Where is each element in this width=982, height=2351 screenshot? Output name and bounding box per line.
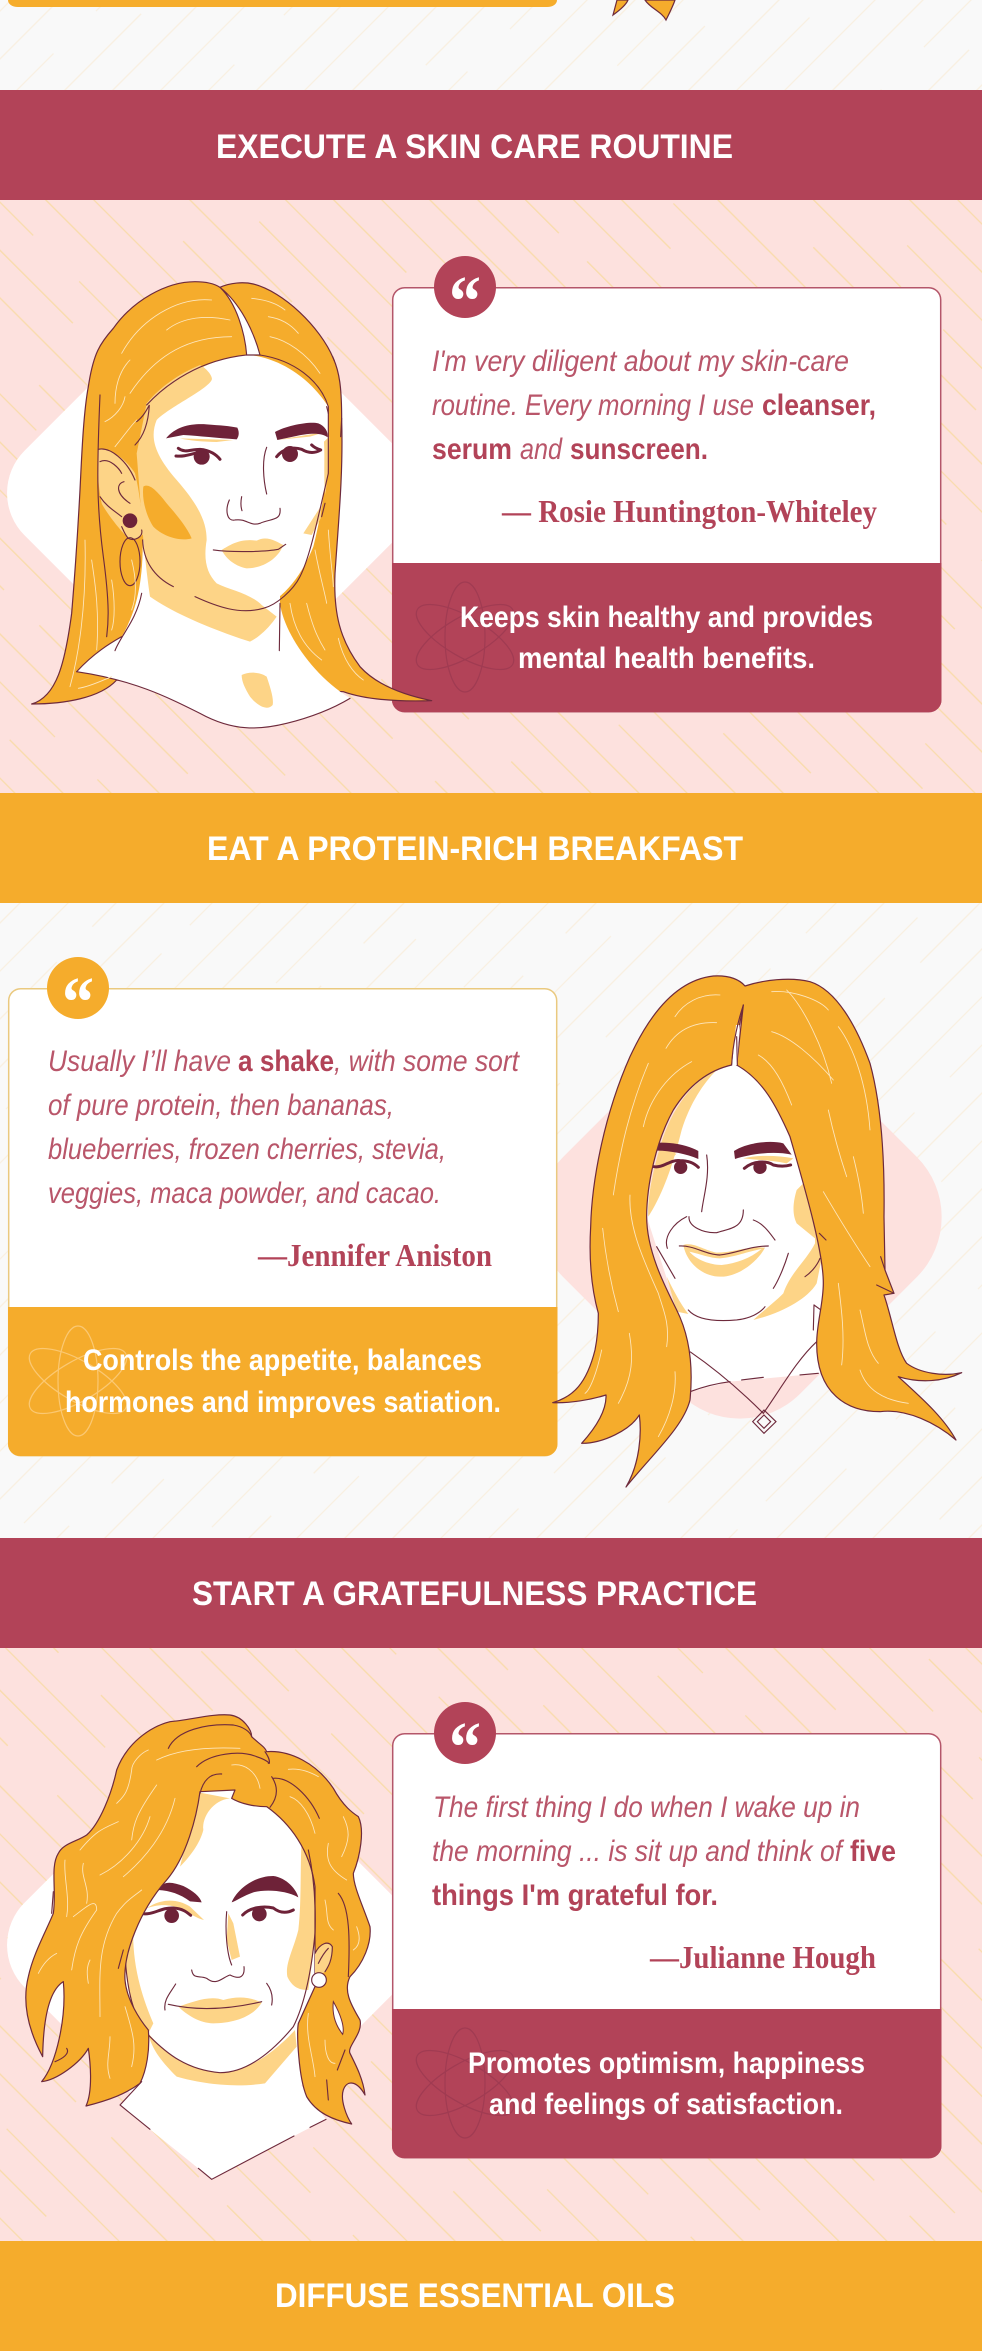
quote text: the morning ... is sit up and think of xyxy=(432,1835,844,1868)
benefit text: Promotes optimism, happiness xyxy=(468,2047,865,2080)
nose and expression lines xyxy=(165,1912,272,2010)
benefit text: hormones and improves satiation. xyxy=(65,1386,501,1419)
quote text: sunscreen. xyxy=(570,433,708,466)
icon: quotation mark badge: “ xyxy=(449,261,481,341)
benefit text: and feelings of satisfaction. xyxy=(489,2088,843,2121)
quote text: cleanser, xyxy=(762,389,876,422)
quote text: blueberries, frozen cherries, stevia, xyxy=(48,1133,446,1166)
heading: Eat a protein-rich breakfast: EAT A PROTEIN-RICH BREAKFAST xyxy=(207,830,743,868)
hair xyxy=(553,976,962,1487)
icon: quotation mark badge xyxy=(47,957,109,1042)
icon: quotation mark badge: “ xyxy=(449,1707,481,1787)
hair xyxy=(26,1715,370,2124)
icon: quotation mark badge xyxy=(434,1702,496,1787)
panel: protein breakfast xyxy=(0,903,982,1538)
neck xyxy=(120,2033,326,2179)
eyebrows xyxy=(166,424,239,439)
icon: atom xyxy=(407,2028,523,2138)
ear and earring xyxy=(98,449,145,539)
quote text xyxy=(432,345,876,466)
quote text: a shake xyxy=(238,1045,334,1078)
lips xyxy=(683,1244,765,1277)
quote text: , with some sort xyxy=(334,1045,520,1078)
heading: Diffuse essential oils xyxy=(0,2241,982,2351)
heading: Execute a skin care routine: EXECUTE A SKIN CARE ROUTINE xyxy=(216,128,733,166)
quote card: Rosie Huntington-Whiteley xyxy=(392,256,942,712)
previous card bottom edge xyxy=(8,0,557,7)
icon: quotation mark badge: “ xyxy=(62,962,94,1042)
white diamond behind portrait xyxy=(0,1715,442,2175)
quote text: routine. Every morning I use xyxy=(432,389,754,422)
white diamond behind portrait xyxy=(0,263,442,723)
quote attribution: —Jennifer Aniston xyxy=(257,1237,492,1273)
quote text xyxy=(432,1791,896,1912)
quote text xyxy=(48,1045,520,1210)
hair parting xyxy=(220,287,260,355)
panel: gratefulness practice xyxy=(0,1648,982,2241)
panel: skin care routine xyxy=(0,200,982,793)
portrait: Jennifer Aniston xyxy=(553,976,962,1487)
quote attribution: —Julianne Hough xyxy=(649,1939,876,1975)
eyebrows xyxy=(657,1143,698,1159)
nose xyxy=(227,447,280,524)
skin shading xyxy=(648,1070,717,1217)
heading: Diffuse essential oils: DIFFUSE ESSENTIAL OILS xyxy=(275,2277,675,2315)
heading: Start a gratefulness practice: START A GRATEFULNESS PRACTICE xyxy=(192,1575,757,1613)
lips xyxy=(178,1997,262,2023)
skin shading xyxy=(137,365,277,642)
heading: Start a gratefulness practice xyxy=(0,1538,982,1648)
benefit text xyxy=(468,2047,865,2121)
quote text: I'm very diligent about my skin-care xyxy=(432,345,849,378)
quote text: things I'm grateful for. xyxy=(432,1879,718,1912)
quote text: serum xyxy=(432,433,512,466)
quote card: Jennifer Aniston xyxy=(8,957,558,1456)
benefit text xyxy=(65,1344,501,1419)
pink diamond behind portrait xyxy=(503,980,977,1454)
panel: top remainder of previous section xyxy=(0,0,982,90)
hair lines xyxy=(52,1725,349,2100)
hair lines xyxy=(98,357,342,637)
quote text: and xyxy=(520,433,563,466)
nose and expression lines xyxy=(657,1155,820,1321)
face xyxy=(138,355,328,610)
heading: Eat a protein-rich breakfast xyxy=(0,793,982,903)
eyes xyxy=(164,1908,179,1923)
icon: quotation mark badge xyxy=(434,256,496,341)
skin shading xyxy=(148,2030,297,2085)
face and neck xyxy=(647,1065,823,1392)
quote text: The first thing I do when I wake up in xyxy=(433,1791,860,1824)
quote attribution: — Rosie Huntington-Whiteley xyxy=(501,493,877,529)
icon: atom xyxy=(20,1326,136,1436)
benefit text: Keeps skin healthy and provides xyxy=(460,601,873,634)
ear and earring xyxy=(315,1943,332,1980)
benefit text: mental health benefits. xyxy=(518,642,815,675)
eyes xyxy=(194,449,210,465)
eyebrows xyxy=(158,1883,202,1902)
quote text: Usually I’ll have xyxy=(48,1045,231,1078)
quote text: five xyxy=(850,1835,896,1868)
eyes xyxy=(674,1161,687,1174)
benefit text: Controls the appetite, balances xyxy=(83,1344,482,1377)
face xyxy=(125,1793,315,2073)
collar line xyxy=(690,1373,818,1392)
portrait: Rosie Huntington-Whiteley xyxy=(32,282,432,728)
necklace xyxy=(690,1342,817,1433)
icon: atom xyxy=(407,582,523,692)
quote card: Julianne Hough xyxy=(392,1702,942,2158)
gap in hair xyxy=(333,2002,343,2034)
portrait: Julianne Hough xyxy=(26,1715,370,2179)
hair tips of previous portrait xyxy=(613,0,675,20)
quote text: of pure protein, then bananas, xyxy=(48,1089,394,1122)
neck and chest xyxy=(77,540,350,728)
quote text: veggies, maca powder, and cacao. xyxy=(48,1177,441,1210)
heading: Execute a skin care routine xyxy=(0,90,982,200)
benefit text xyxy=(460,601,873,675)
